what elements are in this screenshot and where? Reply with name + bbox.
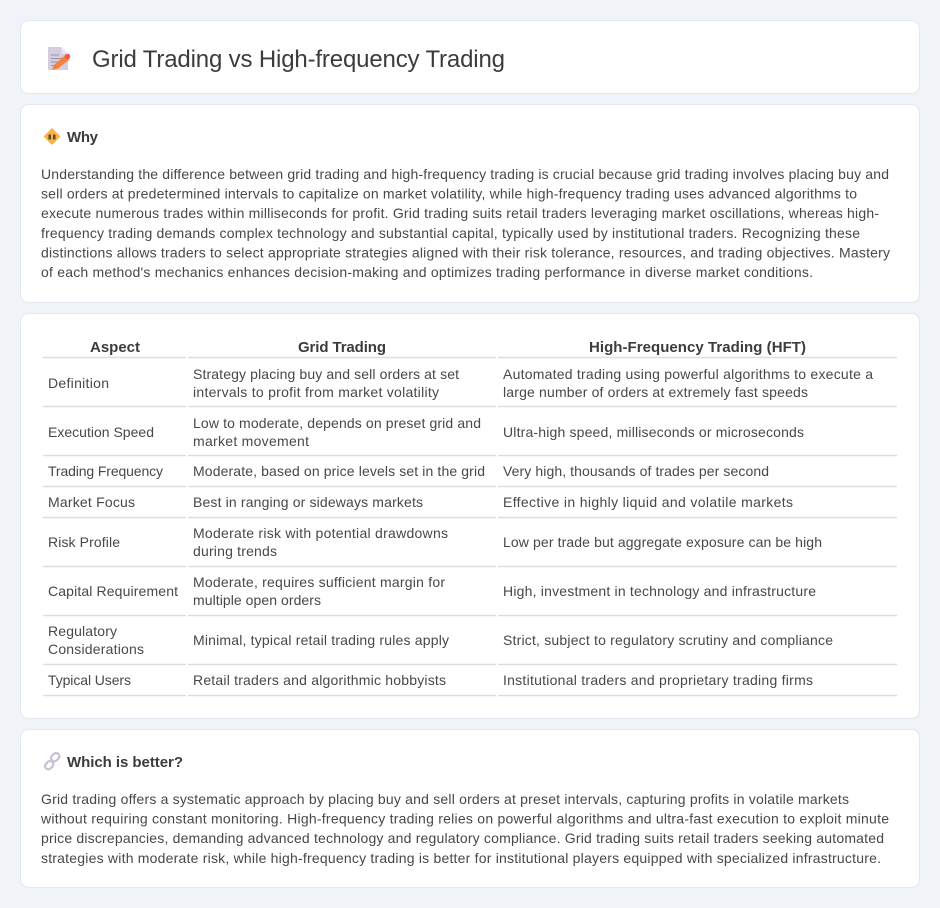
table header row: High-Frequency Trading (HFT) xyxy=(589,339,806,356)
table row: regulatory considerations xyxy=(43,623,897,664)
icon: diamond warning sign xyxy=(44,128,60,145)
table row: execution speed: market movement xyxy=(193,433,309,449)
table row: capital requirement xyxy=(43,574,897,616)
title: Grid Trading vs High-frequency Trading xyxy=(92,46,505,73)
text block: why paragraph: sell orders at predetermined intervals to capitalize on market volatility, while high-frequency trading uses advanced algorithms to xyxy=(41,186,857,202)
table row: capital requirement: multiple open orders xyxy=(193,592,321,608)
table row: definition: Definition xyxy=(48,375,109,391)
table row: market focus: Market Focus xyxy=(48,494,135,510)
table row: regulatory considerations: Regulatory xyxy=(48,623,117,639)
table row: market focus: Effective in highly liquid and volatile markets xyxy=(503,494,793,510)
table row: definition: large number of orders at extremely fast speeds xyxy=(503,384,808,400)
panel: comparison table xyxy=(20,314,920,718)
text block: which is better paragraph: price discrepancies, demanding advanced technology and regulatory compliance. Grid trading suits retail traders seeking automated xyxy=(41,830,884,846)
icon: chain link xyxy=(44,752,61,771)
icon: document with pencil xyxy=(48,47,70,70)
heading: why: Why xyxy=(67,129,99,146)
text block: why paragraph: of each method's mechanics enhances decision-making and optimizes trading performance in diverse market conditions. xyxy=(41,264,813,280)
text block: why paragraph: Understanding the difference between grid trading and high-frequency trading is crucial because grid trading involves placing buy and xyxy=(41,166,889,182)
table row: definition: Strategy placing buy and sell orders at set xyxy=(193,366,459,382)
table row: definition xyxy=(43,366,897,406)
table row: trading frequency: Very high, thousands of trades per second xyxy=(503,463,769,479)
table row: trading frequency: Trading Frequency xyxy=(48,463,163,479)
table header row: Grid Trading xyxy=(298,339,386,356)
table row: definition: intervals to profit from market volatility xyxy=(193,384,439,400)
table row: typical users: Retail traders and algorithmic hobbyists xyxy=(193,672,446,688)
heading: which is better: Which is better? xyxy=(67,754,183,771)
table row: capital requirement: Capital Requirement xyxy=(48,583,178,599)
table row: regulatory considerations: Considerations xyxy=(48,641,144,657)
table row: trading frequency: Moderate, based on price levels set in the grid xyxy=(193,463,485,479)
text block: which is better paragraph xyxy=(40,791,889,866)
table row: capital requirement: Moderate, requires sufficient margin for xyxy=(193,574,445,590)
table row: execution speed: Execution Speed xyxy=(48,424,154,440)
table row: execution speed: Ultra-high speed, milliseconds or microseconds xyxy=(503,424,804,440)
text block: why paragraph: execute numerous trades within milliseconds for profit. Grid trading suits retail traders leveraging market oscillations, whereas high- xyxy=(41,205,879,221)
panel: which is better xyxy=(20,730,920,888)
table row: typical users: Institutional traders and proprietary trading firms xyxy=(503,672,813,688)
panel: why xyxy=(20,104,920,302)
table row: execution speed: Low to moderate, depends on preset grid and xyxy=(193,415,481,431)
table row: risk profile: Low per trade but aggregate exposure can be high xyxy=(503,534,822,550)
table row: typical users: Typical Users xyxy=(48,672,131,688)
panel: title header xyxy=(20,20,920,94)
table header row: Aspect xyxy=(90,339,140,356)
text block: why paragraph xyxy=(41,166,890,280)
table row: risk profile: Moderate risk with potential drawdowns xyxy=(193,525,448,541)
table row: market focus: Best in ranging or sideways markets xyxy=(193,494,423,510)
table header row xyxy=(43,339,897,358)
table row: regulatory considerations: Minimal, typical retail trading rules apply xyxy=(193,632,449,648)
text block: why paragraph: frequency trading demands complex technology and substantial capital, typically used by institutional traders. Recognizing these xyxy=(41,225,860,241)
table row: regulatory considerations: Strict, subject to regulatory scrutiny and compliance xyxy=(503,632,833,648)
table row: risk profile: Risk Profile xyxy=(48,534,120,550)
text block: which is better paragraph: Grid trading offers a systematic approach by placing buy and sell orders at preset intervals, capturing profits in volatile markets xyxy=(41,791,849,807)
table row: risk profile: during trends xyxy=(193,543,277,559)
text block: why paragraph: distinctions allows traders to select appropriate strategies aligned with their risk tolerance, resources, and trading objectives. Mastery xyxy=(41,244,890,260)
table row: trading frequency xyxy=(43,463,897,486)
table row: risk profile xyxy=(43,525,897,566)
table row: execution speed xyxy=(43,415,897,456)
table row: market focus xyxy=(43,494,897,518)
table row: definition: Automated trading using powerful algorithms to execute a xyxy=(503,366,873,382)
text block: which is better paragraph: strategies with moderate risk, while high-frequency trading is better for institutional players equipped with specialized infrastructure. xyxy=(41,850,881,866)
table row: typical users xyxy=(43,672,897,696)
text block: which is better paragraph: without requiring constant monitoring. High-frequency trading relies on powerful algorithms and ultra-fast execution to exploit minute xyxy=(40,811,889,827)
table row: capital requirement: High, investment in technology and infrastructure xyxy=(503,583,816,599)
